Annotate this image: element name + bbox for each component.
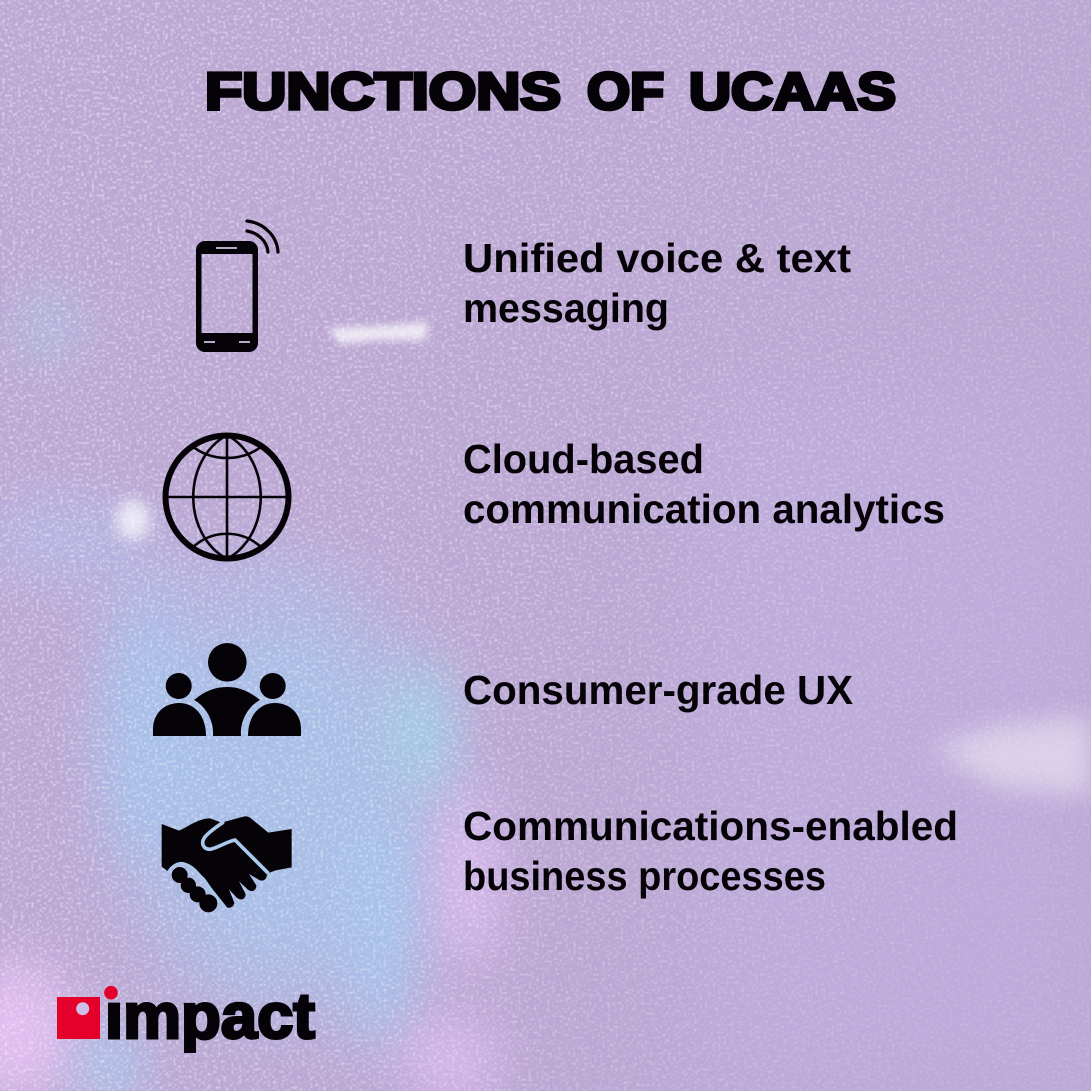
title — [205, 63, 896, 121]
icon: group of people — [153, 643, 301, 736]
text: cloud-based communication analytics: communication analytics — [463, 486, 945, 532]
text: cloud-based communication analytics — [463, 436, 945, 532]
text: unified voice and text messaging: Unified voice & text — [463, 235, 851, 281]
text: communications-enabled business processes — [463, 803, 958, 899]
text: consumer-grade UX: Consumer-grade UX — [463, 667, 853, 713]
icon: globe — [165, 435, 289, 559]
text: communications-enabled business processes: business processes — [463, 853, 826, 899]
title: FUNCTIONS — [205, 63, 561, 121]
title: UCAAS — [689, 63, 896, 121]
text: communications-enabled business processes: Communications-enabled — [463, 803, 958, 849]
text: unified voice and text messaging — [463, 235, 851, 331]
icon: handshake — [162, 816, 292, 912]
icon: smartphone with signal — [196, 221, 278, 352]
title: OF — [587, 63, 664, 121]
text: unified voice and text messaging: messaging — [463, 285, 669, 331]
text: cloud-based communication analytics: Cloud-based — [463, 436, 704, 482]
logo: impact: impact — [105, 980, 315, 1052]
